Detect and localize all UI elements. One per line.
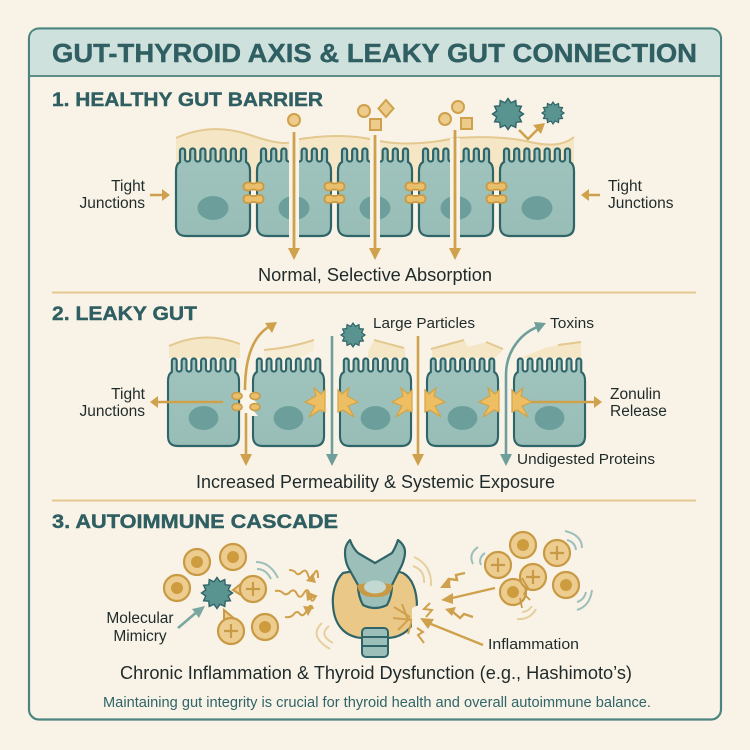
arrow: mimicry [178,606,205,628]
label: tight junctions left: Junctions [80,195,145,212]
label: molecular mimicry: Mimicry [113,628,167,645]
label: inflammation: Inflammation [488,636,579,653]
caption: selective absorption: Normal, Selective Absorption [258,265,492,285]
label: tight junctions left: Tight [111,178,146,195]
signal waves left [256,562,333,649]
label: tight junctions [80,386,146,420]
label: tight junctions right [608,178,674,212]
heading: section 1: 1. HEALTHY GUT BARRIER [52,90,323,111]
label: molecular mimicry: Molecular [106,610,174,627]
panel: healthy gut barrier [80,98,674,285]
mimicry antigen [202,578,232,608]
signal waves around thyroid [413,557,431,586]
arrowheads [150,322,602,466]
inflammation sparks [417,603,432,643]
arrowheads [420,578,456,629]
title: GUT-THYROID AXIS & LEAKY GUT CONNECTION [52,38,697,68]
title banner [30,30,720,76]
label: tight junctions left [80,178,146,212]
isthmus [357,582,393,597]
label: zonulin release [610,386,667,420]
label: molecular mimicry [106,610,174,645]
broken junction [232,392,260,416]
label: undigested proteins: Undigested Proteins [517,451,655,468]
signal waves right [471,531,592,619]
epithelial cells [176,148,574,236]
panel: autoimmune cascade [103,531,651,711]
heading: section 2: 2. LEAKY GUT [52,304,197,325]
squiggle arrowheads [303,573,318,616]
epithelial cells [168,358,585,446]
label: tight junctions: Junctions [80,403,145,420]
cytokine squiggles left [275,570,318,617]
arrow: right junction pointer [581,189,600,201]
label: tight junctions: Tight [111,386,146,403]
nutrient particles [288,100,472,130]
left immune cells [164,544,278,644]
label: tight junctions right: Junctions [608,195,674,212]
heading: section 3: 3. AUTOIMMUNE CASCADE [52,512,338,533]
label: tight junctions right: Tight [608,178,643,195]
absorption arrows [288,130,461,260]
large particle [341,323,365,347]
caption: increased permeability: Increased Permeability & Systemic Exposure [196,472,555,492]
mucus layer [176,129,574,200]
thyroid gland [333,540,427,657]
footer note: Maintaining gut integrity is crucial for thyroid health and overall autoimmune balance. [103,695,651,711]
blocked toxins [492,98,564,139]
thyroid lobes [333,571,417,638]
label: zonulin release: Zonulin [610,386,661,403]
panel: leaky gut [80,315,667,492]
caption: chronic inflammation: Chronic Inflammation & Thyroid Dysfunction (e.g., Hashimoto’s) [120,663,632,683]
larynx [345,540,405,608]
leak arrows [156,325,595,455]
right immune cells [485,532,579,608]
label: large particles: Large Particles [373,315,475,332]
arrow: left junction pointer [150,189,170,201]
label: toxins: Toxins [550,315,594,332]
inflammatory arrows [426,573,495,645]
damaged mucus [169,337,581,358]
inflamed junction bursts [305,388,532,417]
damage cracks [393,604,412,634]
label: zonulin release: Release [610,403,667,420]
lower trachea [362,628,388,657]
tight junctions [244,182,506,203]
